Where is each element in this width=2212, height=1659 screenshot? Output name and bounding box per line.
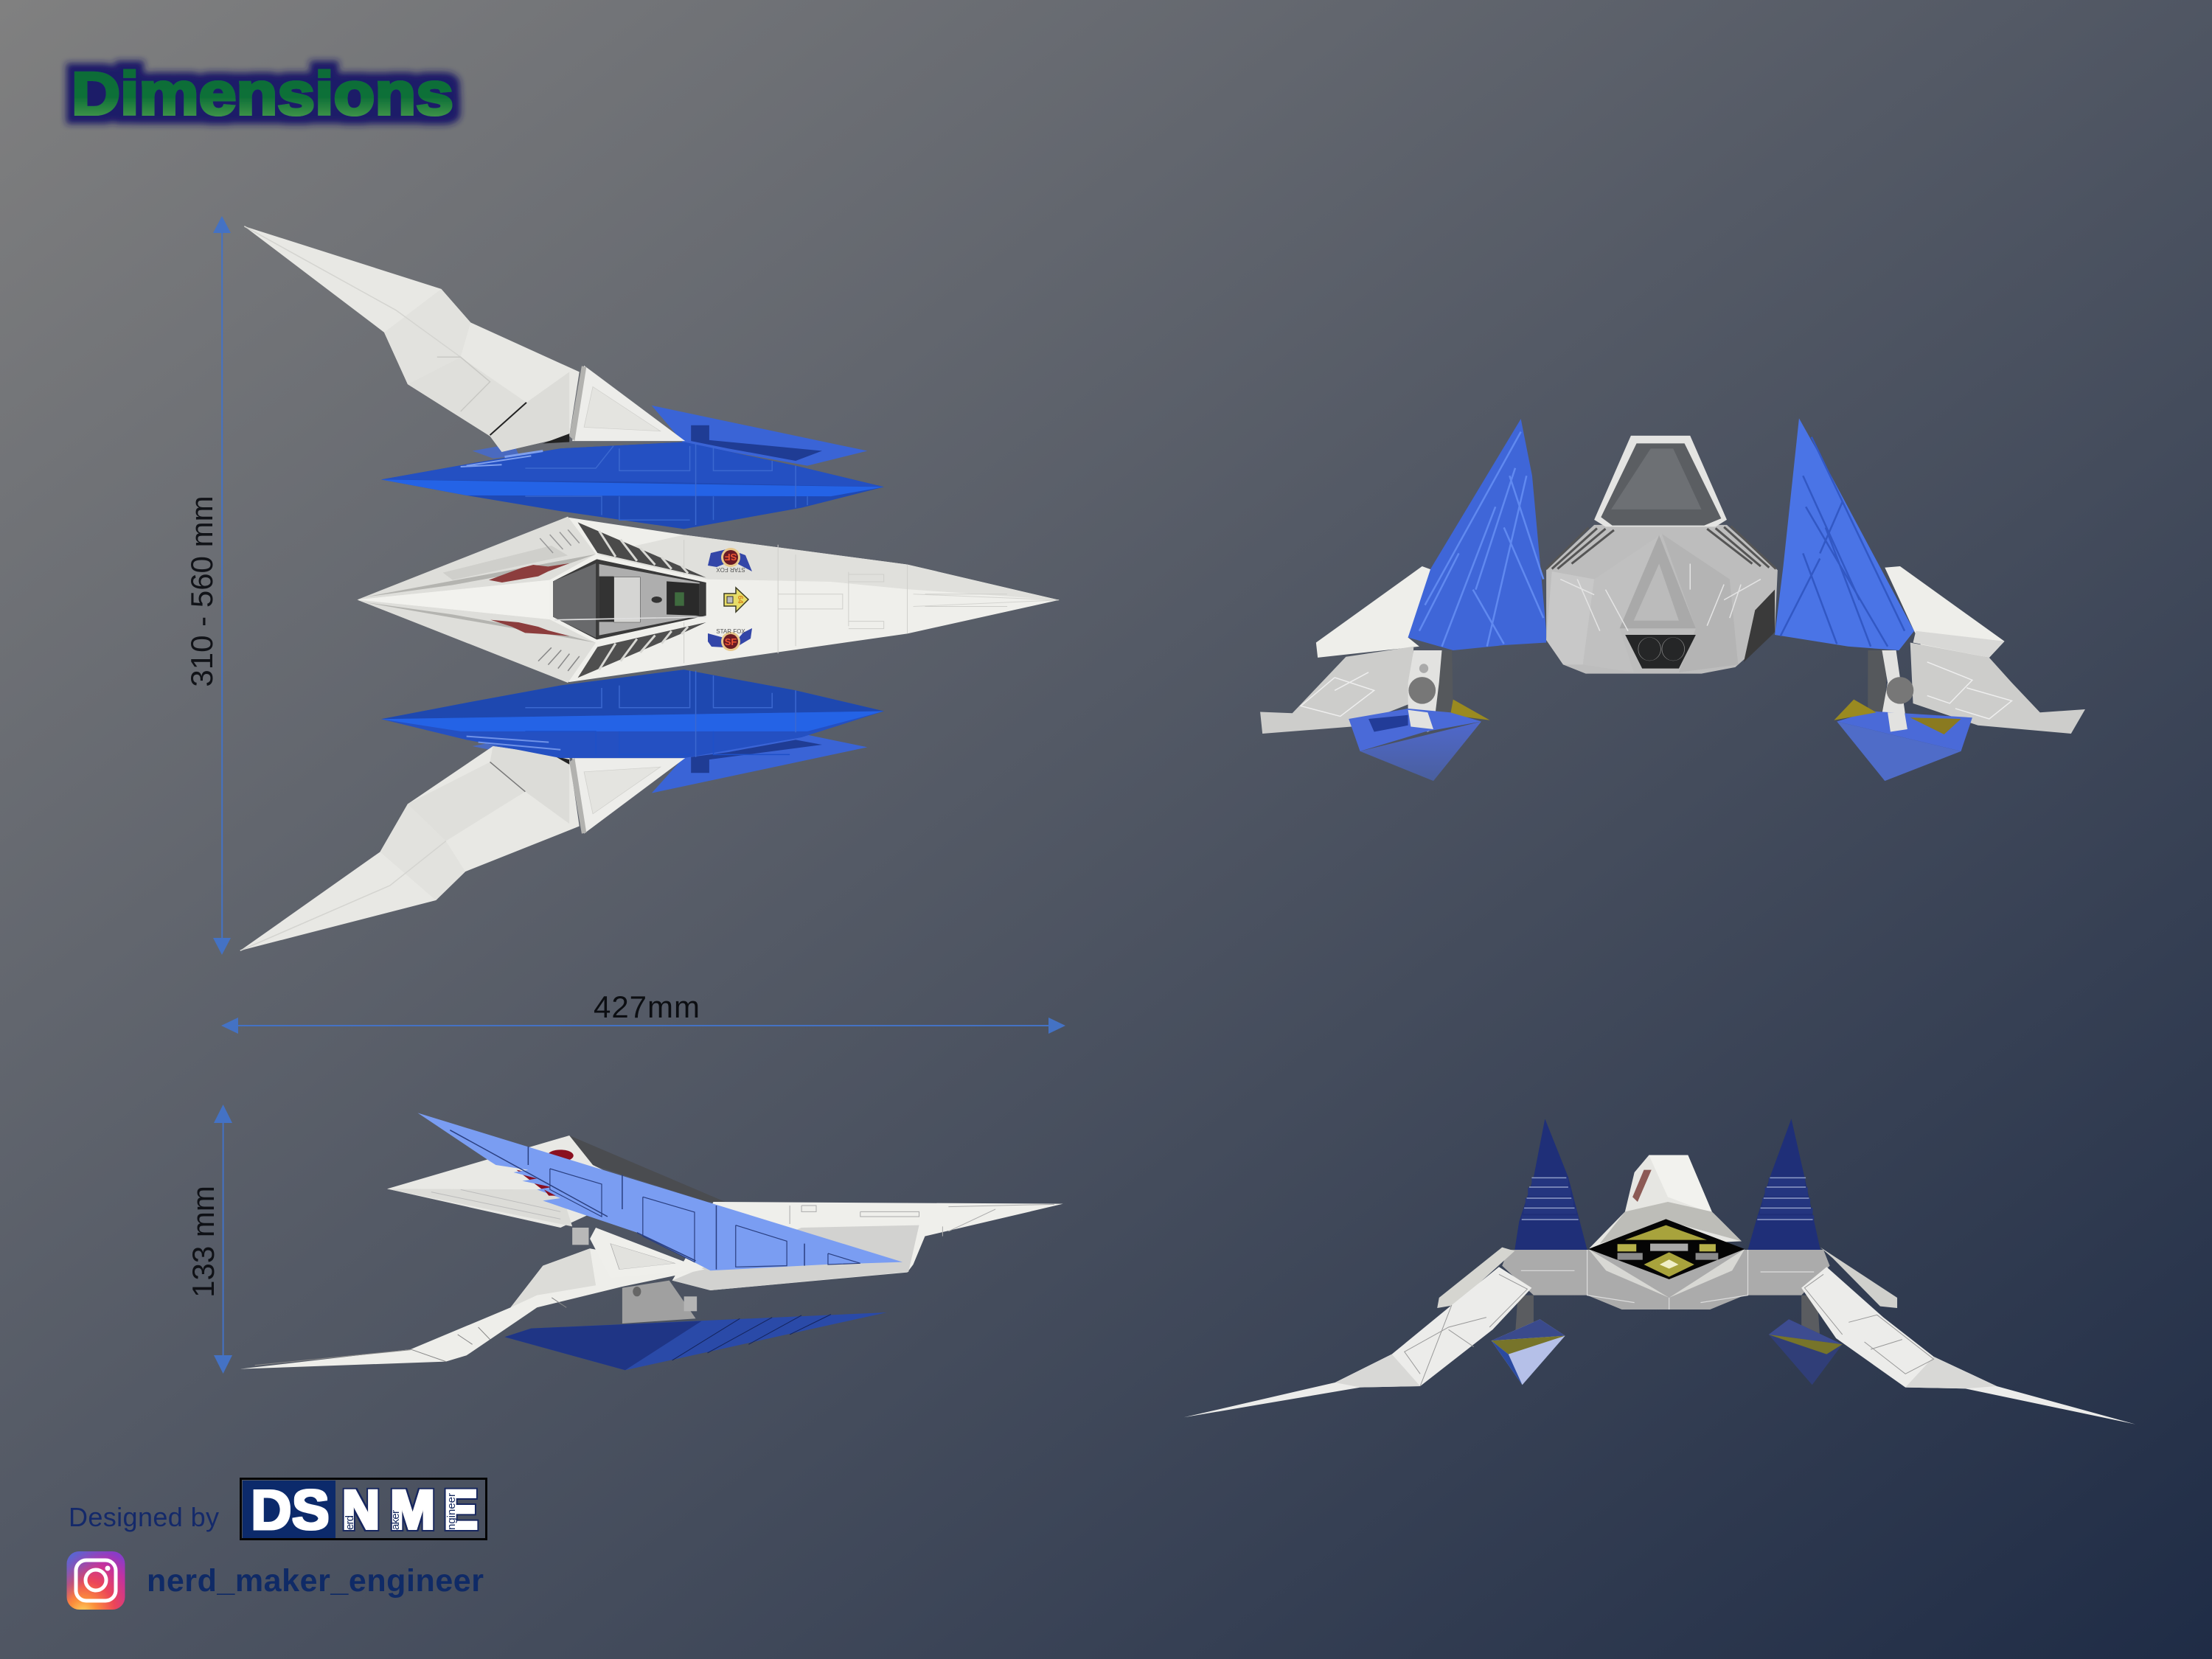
wings, grey lower panels (1260, 643, 2085, 734)
red mark near fin (544, 1189, 556, 1196)
canopy (1594, 436, 1727, 526)
rear view of spacecraft (1184, 1119, 2135, 1425)
title: Dimensions (72, 60, 453, 128)
label: 310 - 560 mm: 310 - 560 mm (184, 495, 219, 687)
centre nose (1589, 1155, 1742, 1248)
lower wing (240, 746, 685, 950)
emblem: yellow arrow (724, 588, 748, 612)
dimension arrow: width 427mm (221, 1018, 1065, 1034)
engine diamond (1588, 1219, 1745, 1279)
label: 133 mm: 133 mm (186, 1186, 220, 1298)
logo: DSNME: E (444, 1479, 478, 1540)
lower vents (578, 622, 706, 678)
logo: DSNME: M (390, 1479, 435, 1540)
cockpit and markings (357, 517, 708, 683)
left long wing (1184, 1267, 1531, 1417)
rear fin upper (473, 406, 867, 466)
tail white panel (387, 1135, 643, 1228)
white triangular fin (590, 1228, 705, 1278)
lower wing (240, 1248, 705, 1369)
tail dark edge (569, 1135, 725, 1202)
dimension arrow: height 133 mm (214, 1105, 232, 1374)
fuselage (358, 518, 1059, 682)
logo: DSNME (240, 1479, 487, 1542)
right long wing (1801, 1267, 2135, 1425)
emblem: lower Star Fox wings (708, 628, 752, 651)
logo: DSNME: ngineer (445, 1493, 458, 1530)
centre nose (357, 580, 550, 619)
rear fin lower (473, 735, 867, 793)
lower blue fin (504, 1312, 887, 1370)
upper blue wing (381, 442, 884, 529)
struts (1408, 650, 1913, 732)
emblem: upper Star Fox wings (708, 548, 752, 573)
logo: DSNME: N (342, 1479, 380, 1540)
left blue spike (1514, 1119, 1587, 1250)
canopy (550, 554, 708, 643)
landing strut (572, 1228, 697, 1324)
emblem: upper Star Fox wings: STAR FOX (716, 566, 745, 573)
icon: Instagram (66, 1551, 125, 1610)
logo: DSNME: DS (251, 1479, 330, 1542)
rear body (1502, 1249, 1830, 1310)
dimension arrow: height 310 - 560 mm (213, 216, 231, 955)
red markings (489, 563, 569, 636)
left pod (1492, 1319, 1565, 1385)
upper wing edges (1437, 1248, 1897, 1308)
upper wing (244, 226, 685, 452)
upper nose facet (357, 517, 596, 599)
wings, white upper panels (1316, 566, 2005, 658)
credit: Designed by: Designed by (69, 1502, 219, 1532)
fuselage (1546, 525, 1778, 674)
right blue spike (1748, 1119, 1820, 1250)
upper vents (578, 522, 706, 577)
side view of spacecraft (240, 1113, 1063, 1370)
lower nose facet (357, 599, 596, 683)
credit: instagram handle: nerd_maker_engineer (147, 1563, 484, 1599)
emblem: upper Star Fox wings: SF (725, 552, 737, 563)
emblem: lower Star Fox wings: SF (725, 636, 737, 647)
rear fuselage (672, 1202, 1063, 1290)
right pod (1769, 1319, 1843, 1385)
front view of spacecraft (1260, 418, 2085, 781)
emblem: yellow arrow: 64 (736, 595, 744, 604)
right blue fin (1775, 418, 1914, 650)
struts (1514, 1295, 1820, 1344)
lower blue wing (381, 669, 884, 758)
top view of spacecraft (240, 226, 1059, 950)
left lower fin (1349, 700, 1490, 781)
left blue fin (1408, 419, 1546, 650)
right lower fin (1834, 700, 1972, 781)
emblem: lower Star Fox wings: STAR FOX (716, 628, 745, 635)
label: 427mm: 427mm (594, 990, 700, 1024)
logo: DSNME: aker (389, 1510, 402, 1530)
logo: DSNME: erd (344, 1515, 356, 1530)
light blue fin (417, 1113, 902, 1270)
